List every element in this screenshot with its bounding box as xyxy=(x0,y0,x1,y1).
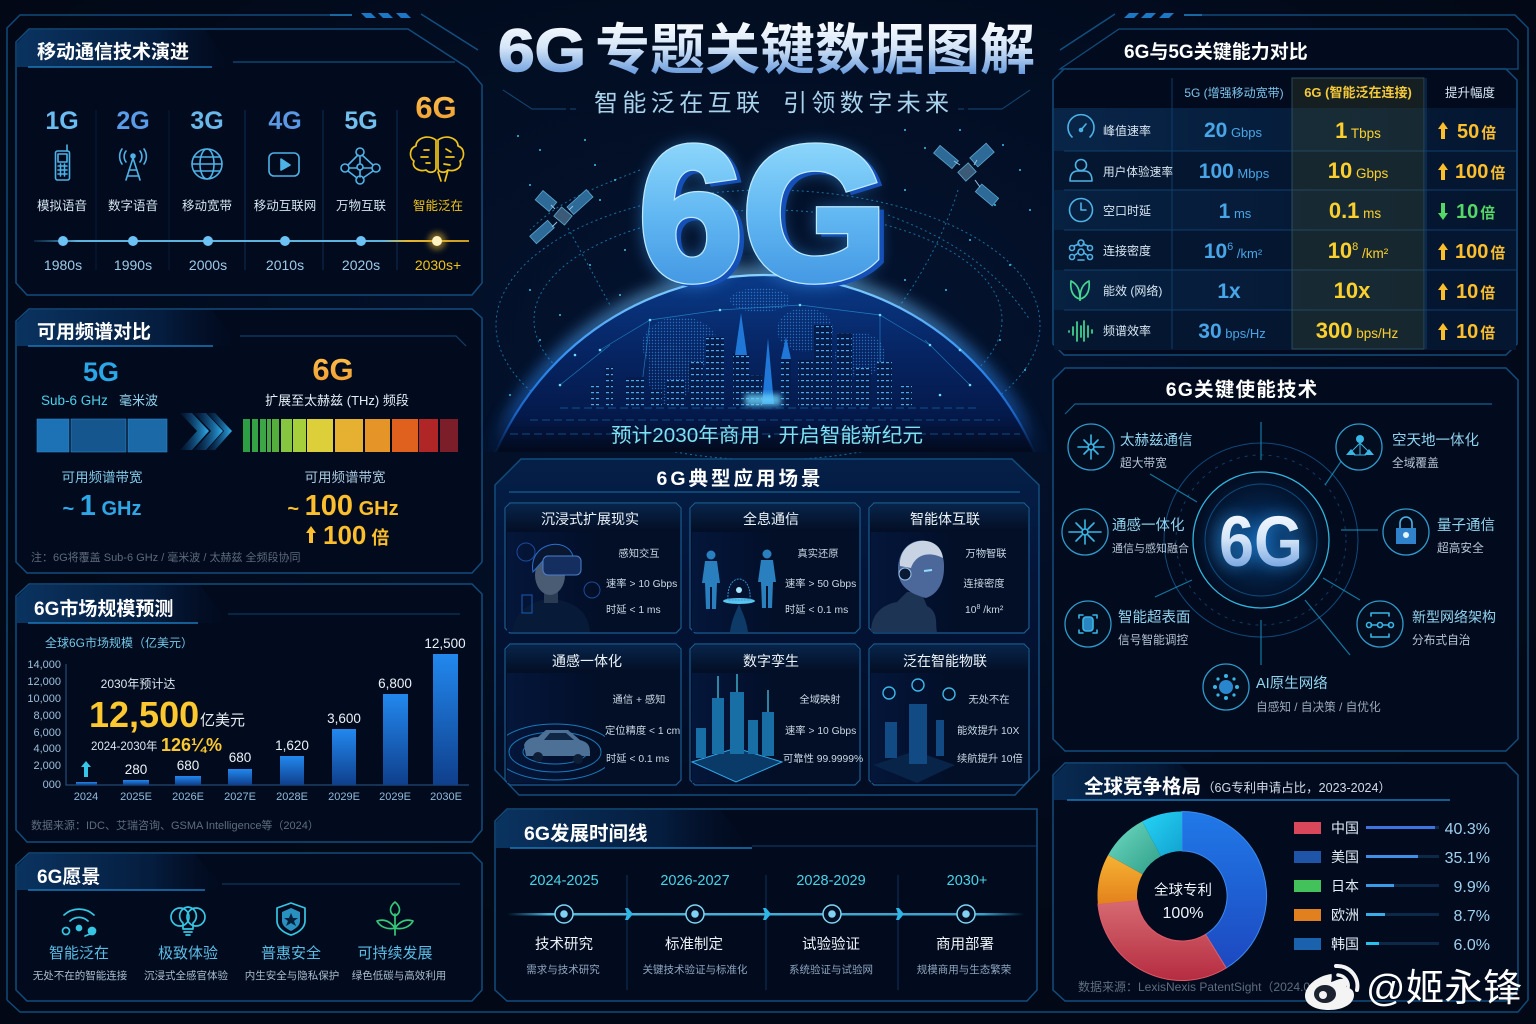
timeline track xyxy=(507,905,1024,923)
card text: 万物智联 xyxy=(965,547,1007,560)
phase details: 需求与技术研究 xyxy=(526,963,600,976)
heading: timeline: 6G发展时间线 xyxy=(524,822,648,845)
hero illustration xyxy=(490,129,1040,458)
heading: technologies: 6G关键使能技术 xyxy=(1166,379,1318,401)
generation captions: 数字语音 xyxy=(108,198,158,213)
chart subtitle: 全球6G市场规模（亿美元） xyxy=(45,635,193,650)
bar chart: 2026E xyxy=(172,791,204,803)
tech: ISAC: 通感一体化 xyxy=(1112,517,1184,534)
improvement values: 100倍 xyxy=(1455,241,1505,263)
title: 专题关键数据图解 xyxy=(595,19,1035,81)
phase dates: 2028-2029 xyxy=(796,873,866,889)
timeline xyxy=(34,232,469,250)
phase details: 关键技术验证与标准化 xyxy=(642,963,748,976)
5G values: 10 xyxy=(1204,240,1227,263)
card text: 定位精度 < 1 cm xyxy=(605,724,680,737)
bar chart: 000 xyxy=(43,779,61,791)
icon: waveform xyxy=(1069,321,1092,341)
card text xyxy=(605,693,680,765)
generation captions: 智能泛在 xyxy=(413,198,463,213)
big 6G: 6G xyxy=(639,109,887,321)
icon: gauge xyxy=(1068,115,1094,137)
donut chart: 全球专利 xyxy=(1154,881,1212,899)
callout: 2030 forecast: 亿美元 xyxy=(200,712,245,729)
card text: 感知交互 xyxy=(618,547,660,560)
tech: quantum: 量子通信 xyxy=(1437,517,1495,534)
tech: quantum: 超高安全 xyxy=(1437,541,1484,555)
bar chart: 6,000 xyxy=(33,727,61,739)
improvement values: 100倍 xyxy=(1455,161,1505,183)
5G values: 100 Mbps xyxy=(1199,160,1270,183)
vision captions: 绿色低碳与高效利用 xyxy=(352,969,446,982)
6G values: 0.1 ms xyxy=(1329,198,1381,223)
heading: competition: （6G专利申请占比，2023-2024） xyxy=(1202,780,1391,795)
heading: spectrum: 可用频谱对比 xyxy=(37,321,151,343)
phase dates: 2024-2025 xyxy=(529,873,599,889)
6G bandwidth xyxy=(287,469,399,550)
generation labels: 5G xyxy=(344,107,378,135)
panel: 6G vision xyxy=(16,853,482,1001)
card text xyxy=(963,547,1007,616)
5G values: 1 ms xyxy=(1219,200,1252,223)
bar chart: 14,000 xyxy=(27,659,61,671)
bar chart: 680 xyxy=(229,750,251,765)
icon: bulb xyxy=(171,907,205,935)
skyline xyxy=(590,325,912,407)
row labels xyxy=(1103,123,1173,338)
legend: 40.3% xyxy=(1445,821,1490,838)
icon: tower xyxy=(120,149,146,180)
card text: 能效提升 10X xyxy=(957,724,1020,737)
decade labels: 2030s+ xyxy=(415,257,461,273)
icon: weibo logo xyxy=(1305,966,1357,1010)
callout: 2030 forecast: 126¼% xyxy=(161,735,222,755)
6G spectrum label: 扩展至太赫兹 (THz) 频段 xyxy=(265,393,409,408)
card text: 时延 < 0.1 ms xyxy=(785,604,848,616)
improvement values: 10倍 xyxy=(1456,281,1495,303)
title: 6G xyxy=(498,17,586,84)
callout: 2030 forecast xyxy=(89,677,245,755)
tech: terahertz: 超大带宽 xyxy=(1120,456,1167,470)
generation labels: 6G xyxy=(415,90,457,125)
legend: 韩国 xyxy=(1331,936,1359,952)
tech: AI native: 自感知 / 自决策 / 自优化 xyxy=(1256,700,1381,714)
row labels: 峰值速率 xyxy=(1103,123,1151,138)
phase details: 规模商用与生态繁荣 xyxy=(917,963,1012,976)
vision captions: 无处不在的智能连接 xyxy=(33,969,128,982)
icon: clock xyxy=(1070,198,1092,222)
panel: enabling technologies xyxy=(1053,368,1518,751)
legend: 欧洲 xyxy=(1331,907,1359,923)
tech: AI native xyxy=(1203,664,1381,714)
6G values: 10 xyxy=(1328,238,1352,263)
heading: competition xyxy=(1054,764,1450,800)
card text: 续航提升 10倍 xyxy=(957,752,1023,765)
tech: AI native: AI原生网络 xyxy=(1256,675,1328,692)
legend: 日本 xyxy=(1331,878,1359,894)
tech: space-air-ground: 全域覆盖 xyxy=(1392,456,1439,470)
divider lines xyxy=(96,110,397,270)
panel: global competition xyxy=(1053,763,1518,1001)
card text: 全域映射 xyxy=(799,693,841,706)
illustration: hologram figures xyxy=(702,550,776,632)
arrows xyxy=(625,908,904,920)
donut chart xyxy=(1098,812,1266,980)
generation captions: 模拟语音 xyxy=(37,198,87,213)
tech: ISAC xyxy=(1062,509,1189,555)
legend: 6.0% xyxy=(1454,937,1490,954)
6G spectrum bar xyxy=(243,419,458,452)
phase dates: 2026-2027 xyxy=(660,873,730,889)
legend: 美国 xyxy=(1331,849,1359,865)
phase names: 商用部署 xyxy=(936,936,994,953)
bar chart: 2030E xyxy=(430,791,462,803)
callout: 2030 forecast: 2024-2030年 xyxy=(91,739,158,753)
card text xyxy=(606,547,677,616)
bar chart: 8,000 xyxy=(33,710,61,722)
6G values: 1 Tbps xyxy=(1335,118,1381,143)
icon: play xyxy=(269,153,299,176)
callout: 2030 forecast: 12,500 xyxy=(89,694,199,735)
tech: space-air-ground xyxy=(1336,424,1479,470)
card: agent connectivity: 智能体互联 xyxy=(910,511,980,527)
generation captions xyxy=(37,198,463,213)
phase names: 技术研究 xyxy=(535,936,593,953)
hero tagline: 预计2030年商用 · 开启智能新纪元 xyxy=(611,424,923,447)
tech: smart surface: 信号智能调控 xyxy=(1118,633,1188,647)
phase names xyxy=(535,936,994,953)
card text xyxy=(783,693,863,765)
decade labels: 1990s xyxy=(114,257,152,273)
subtitle: 引领数字未来 xyxy=(783,90,953,117)
arrow: up xyxy=(81,761,91,777)
table xyxy=(1053,69,1517,355)
phase names: 试验验证 xyxy=(802,936,860,953)
bar chart: 1,620 xyxy=(275,738,309,753)
icon: brain xyxy=(410,137,464,181)
icon: network xyxy=(341,148,380,184)
vision captions xyxy=(33,944,446,982)
row labels: 能效 (网络) xyxy=(1103,283,1162,298)
row labels: 连接密度 xyxy=(1103,243,1151,258)
card: ubiquitous IoT xyxy=(869,644,1029,785)
card: immersive XR: 沉浸式扩展现实 xyxy=(541,511,639,527)
card text: 时延 < 0.1 ms xyxy=(606,753,669,765)
core 6G diagram xyxy=(1150,422,1378,665)
panel: 6G vs 5G table xyxy=(1053,29,1518,355)
tech: network architecture: 分布式自治 xyxy=(1412,633,1471,647)
generation labels: 3G xyxy=(190,107,224,135)
legend: 中国 xyxy=(1331,820,1359,836)
bar chart: 12,500 xyxy=(424,636,466,651)
bar chart: 3,600 xyxy=(327,711,361,726)
bar chart: 280 xyxy=(125,762,147,777)
subtitle: 智能泛在互联 xyxy=(594,90,764,117)
5G values: 1x xyxy=(1217,280,1241,303)
generation captions: 移动互联网 xyxy=(254,199,316,213)
vision captions: 沉浸式全感官体验 xyxy=(144,969,228,982)
row labels: 频谱效率 xyxy=(1103,323,1151,338)
improvement values xyxy=(1455,121,1505,343)
vision captions: 普惠安全 xyxy=(261,944,321,962)
phase dates xyxy=(529,873,987,889)
heading: comparison: 6G与5G关键能力对比 xyxy=(1124,41,1308,63)
5G values: /km² xyxy=(1233,246,1263,261)
heading: timeline xyxy=(496,810,1037,848)
6G values: 10 Gbps xyxy=(1328,158,1388,183)
decade labels: 2020s xyxy=(342,257,380,273)
tech: smart surface: 智能超表面 xyxy=(1118,609,1190,626)
tech: space-air-ground: 空天地一体化 xyxy=(1392,432,1479,449)
panel: mobile technology evolution xyxy=(16,29,482,295)
tech: smart surface xyxy=(1065,601,1190,647)
illustration: twin city xyxy=(692,674,782,782)
card: ISAC: 通感一体化 xyxy=(552,653,622,669)
6G values: 10x xyxy=(1334,278,1371,303)
card: agent connectivity xyxy=(869,503,1029,633)
bar chart: 2025E xyxy=(120,791,152,803)
heading: technologies xyxy=(1065,379,1492,414)
card: digital twin xyxy=(690,644,863,785)
6G values: /km² xyxy=(1358,246,1389,261)
5G values: 6 xyxy=(1227,241,1233,253)
heading: evolution xyxy=(17,30,455,67)
tech: network architecture xyxy=(1357,601,1496,647)
generation labels: 4G xyxy=(268,107,302,135)
phase details xyxy=(526,963,1012,976)
tech: quantum xyxy=(1383,509,1495,555)
row labels: 用户体验速率 xyxy=(1103,164,1173,179)
heading: vision: 6G愿景 xyxy=(37,866,100,888)
heading: market: 6G市场规模预测 xyxy=(34,597,173,620)
core 6G diagram: 6G xyxy=(1219,503,1303,582)
arrow: chevrons xyxy=(180,413,232,450)
illustration: car with rings xyxy=(507,724,605,780)
decade labels: 2010s xyxy=(266,257,304,273)
callout: 2030 forecast: 2030年预计达 xyxy=(101,677,175,691)
bar chart: 2024 xyxy=(74,791,98,803)
donut chart: 100% xyxy=(1163,905,1203,922)
note: 注：6G将覆盖 Sub-6 GHz / 毫米波 / 太赫兹 全频段协同 xyxy=(31,550,301,564)
bar chart: 2029E xyxy=(379,791,411,803)
icon: plant xyxy=(377,902,413,935)
column headers xyxy=(1184,85,1495,100)
card text: /km² xyxy=(980,605,1004,616)
decade labels: 2000s xyxy=(189,257,227,273)
card text: 速率 > 50 Gbps xyxy=(785,577,856,590)
improvement arrows xyxy=(1438,122,1448,340)
orbits xyxy=(496,170,1040,460)
card text: 8 xyxy=(976,604,980,611)
bar chart: 2027E xyxy=(224,791,256,803)
tech: terahertz xyxy=(1068,424,1192,470)
bar chart: 4,000 xyxy=(33,743,61,755)
legend: 35.1% xyxy=(1445,850,1490,867)
5G bandwidth: ~ 1 GHz xyxy=(63,490,141,522)
vision captions: 可持续发展 xyxy=(357,945,433,962)
5G spectrum label: Sub-6 GHz xyxy=(41,393,108,408)
card text: 可靠性 99.9999% xyxy=(783,752,863,765)
legend xyxy=(1294,820,1490,954)
generation captions: 万物互联 xyxy=(336,199,386,213)
tech: terahertz: 太赫兹通信 xyxy=(1120,432,1192,449)
bar chart: 6,800 xyxy=(378,676,412,691)
6G values xyxy=(1316,118,1398,343)
icon: shield xyxy=(277,903,305,935)
vision captions: 内生安全与隐私保护 xyxy=(245,969,339,982)
column headers: 6G (智能泛在连接) xyxy=(1304,85,1412,100)
card text: 时延 < 1 ms xyxy=(606,604,661,616)
panel: development timeline xyxy=(495,809,1037,1001)
5G values: 20 Gbps xyxy=(1204,119,1263,142)
big 6G: 6G xyxy=(639,108,887,320)
card: digital twin: 数字孪生 xyxy=(743,653,799,669)
5G spectrum bar xyxy=(37,419,167,452)
card text: 速率 > 10 Gbps xyxy=(606,577,677,590)
panel: spectrum comparison xyxy=(16,309,482,573)
spires xyxy=(735,313,791,404)
bar chart: 12,000 xyxy=(27,676,61,688)
core 6G diagram: 6G xyxy=(1214,503,1308,582)
5G spectrum label: 毫米波 xyxy=(119,393,158,408)
table rows xyxy=(1054,108,1516,310)
6G bandwidth: 可用频谱带宽 xyxy=(304,469,386,485)
source: 数据来源：LexisNexis PatentSight（2024.06） xyxy=(1078,979,1329,994)
heading: vision xyxy=(17,854,460,890)
heading: spectrum xyxy=(17,310,466,346)
heading: evolution: 移动通信技术演进 xyxy=(37,41,189,63)
card text xyxy=(785,547,856,616)
6G spectrum label: 6G xyxy=(312,352,354,387)
card: hologram: 全息通信 xyxy=(743,511,799,527)
card text: 无处不在 xyxy=(968,694,1010,706)
6G bandwidth: 100 倍 xyxy=(323,520,389,550)
6G values: 8 xyxy=(1352,241,1358,253)
phase details: 系统验证与试验网 xyxy=(789,963,873,976)
card: ISAC xyxy=(495,644,681,785)
5G bandwidth: 可用频谱带宽 xyxy=(62,469,142,485)
bar chart: 10,000 xyxy=(27,693,61,705)
generation captions: 移动宽带 xyxy=(182,198,232,213)
6G values: 300 bps/Hz xyxy=(1316,318,1398,343)
6G bandwidth: ~ 100 GHz xyxy=(287,490,399,522)
column headers: 5G (增强移动宽带) xyxy=(1184,85,1284,100)
phase dates: 2030+ xyxy=(947,873,987,889)
generation labels: 1G xyxy=(45,107,79,135)
bar chart: 2,000 xyxy=(33,760,61,772)
card text: 连接密度 xyxy=(963,577,1005,590)
card text: 10 xyxy=(965,605,976,616)
legend: 8.7% xyxy=(1454,908,1490,925)
legend: 9.9% xyxy=(1454,879,1490,896)
illustration: robot xyxy=(871,540,944,632)
bar chart xyxy=(27,636,469,803)
illustration: VR user xyxy=(512,543,600,632)
generation labels: 2G xyxy=(116,107,150,135)
improvement values: 10倍 xyxy=(1456,201,1495,223)
icon: leaf xyxy=(1071,281,1089,301)
card text xyxy=(957,694,1023,765)
card text: 真实还原 xyxy=(797,547,839,560)
6G column highlight xyxy=(1292,78,1424,349)
column headers: 提升幅度 xyxy=(1445,85,1495,100)
card: ubiquitous IoT: 泛在智能物联 xyxy=(903,653,987,669)
6G spectrum label xyxy=(265,352,409,408)
network nodes xyxy=(560,304,970,384)
big 6G: 6G xyxy=(644,111,892,323)
phase dividers xyxy=(627,875,898,990)
bar chart: 680 xyxy=(177,758,199,773)
stars xyxy=(510,130,1030,445)
icon: phone xyxy=(56,145,70,180)
source: 数据来源：IDC、艾瑞咨询、GSMA Intelligence等（2024） xyxy=(31,818,319,832)
phase names: 标准制定 xyxy=(665,936,723,953)
panel: market forecast xyxy=(16,584,482,842)
vision captions: 极致体验 xyxy=(158,945,218,962)
bar chart: 2028E xyxy=(276,791,308,803)
continents xyxy=(642,288,885,405)
5G spectrum label xyxy=(41,357,158,408)
improvement values: 50倍 xyxy=(1457,121,1496,143)
icon: density xyxy=(1070,240,1092,260)
watermark: @姬永锋 xyxy=(1366,968,1522,1010)
big 6G: 6G xyxy=(639,108,887,320)
heading: competition: 全球竞争格局 xyxy=(1084,775,1201,798)
subtitle xyxy=(503,90,1030,117)
card text: 速率 > 10 Gbps xyxy=(785,724,856,737)
improvement values: 10倍 xyxy=(1456,321,1495,343)
icon: wifi xyxy=(62,909,96,936)
5G spectrum label: 5G xyxy=(83,357,119,387)
heading: applications: 6G典型应用场景 xyxy=(656,467,824,490)
panel: application scenarios xyxy=(495,459,1039,795)
icon: satellite left xyxy=(530,190,593,244)
generation labels xyxy=(45,90,457,135)
icon: satellite right xyxy=(934,143,999,206)
decade labels xyxy=(44,257,461,273)
icon: user xyxy=(1070,160,1092,181)
card: immersive XR xyxy=(505,503,681,633)
vision captions: 智能泛在 xyxy=(49,944,109,962)
decade labels: 1980s xyxy=(44,257,82,273)
card text: 通信 + 感知 xyxy=(613,693,665,706)
5G bandwidth xyxy=(62,469,142,522)
illustration: smart city icons xyxy=(873,679,955,783)
earth dome xyxy=(490,257,1040,452)
5G values: 30 bps/Hz xyxy=(1198,320,1266,343)
bar chart: 2029E xyxy=(328,791,360,803)
heading: market xyxy=(17,585,460,623)
tech: ISAC: 通信与感知融合 xyxy=(1112,541,1189,555)
row labels: 空口时延 xyxy=(1103,204,1151,218)
icon: globe xyxy=(192,149,222,179)
watermark xyxy=(1305,966,1522,1010)
tech: network architecture: 新型网络架构 xyxy=(1412,609,1496,625)
5G values xyxy=(1198,119,1270,343)
card: hologram xyxy=(690,503,860,633)
